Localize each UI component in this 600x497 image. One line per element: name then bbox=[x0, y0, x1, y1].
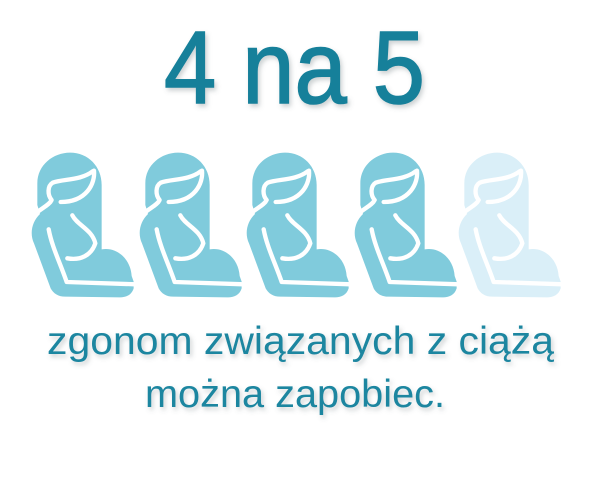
icon row: pregnant women bbox=[32, 153, 563, 297]
caption bbox=[47, 320, 554, 416]
icon: pregnant woman 5 (faded) bbox=[459, 153, 563, 297]
caption line 1: zgonom związanych z ciążą bbox=[47, 320, 554, 363]
icon: pregnant woman 4 bbox=[355, 153, 459, 297]
caption line 2: można zapobiec. bbox=[145, 373, 445, 416]
icon: pregnant woman 2 bbox=[140, 153, 244, 297]
icon: pregnant woman 1 bbox=[32, 153, 136, 297]
icon: pregnant woman 3 bbox=[247, 153, 351, 297]
title: 4 na 5 bbox=[164, 10, 425, 125]
